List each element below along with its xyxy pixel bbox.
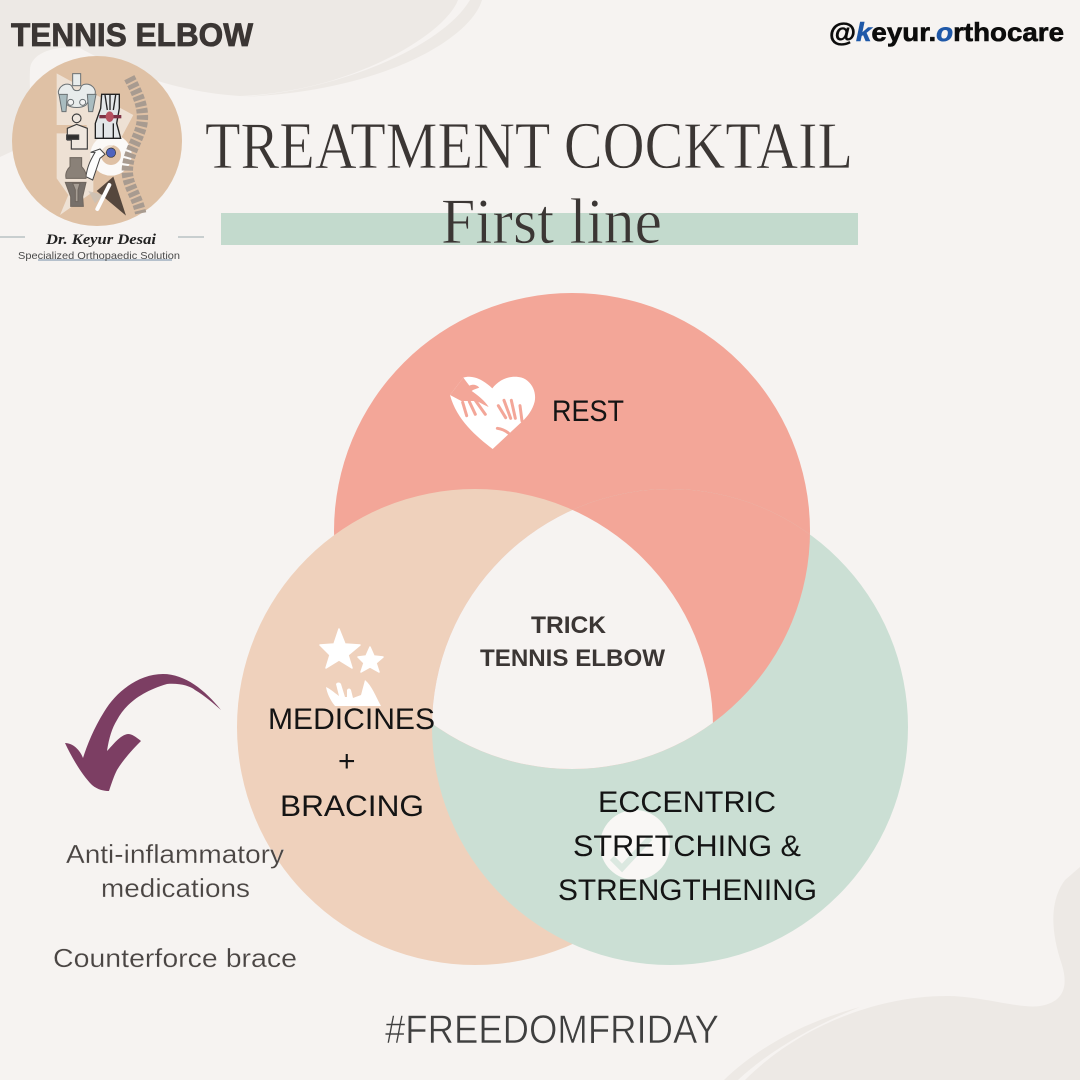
label: eccentric stretching and strengthening: STRENGTHENING bbox=[558, 874, 817, 907]
venn diagram bbox=[237, 293, 908, 965]
icon: pelvis bbox=[58, 74, 96, 112]
logo divider lines bbox=[0, 237, 204, 260]
title: TREATMENT COCKTAIL bbox=[205, 109, 853, 183]
icon: brown triangle and bone bbox=[88, 177, 126, 216]
side note: brace: Counterforce brace bbox=[53, 943, 297, 973]
background blob: bottom right bbox=[724, 867, 1080, 1080]
center label: TENNIS ELBOW bbox=[480, 645, 665, 672]
label: eccentric stretching and strengthening: ECCENTRIC bbox=[598, 786, 776, 819]
icon: spine bbox=[127, 78, 142, 213]
icon: knee replacement bbox=[65, 158, 86, 206]
label: eccentric stretching and strengthening: STRETCHING & bbox=[573, 830, 801, 863]
side note: medications bbox=[66, 839, 284, 903]
label: eccentric stretching and strengthening bbox=[558, 786, 817, 907]
label: medicines and bracing: + bbox=[338, 745, 356, 778]
label: medicines and bracing bbox=[268, 703, 435, 823]
side note: medications: Anti-inflammatory bbox=[66, 839, 284, 869]
highlight band bbox=[221, 213, 858, 245]
center label: TRICK bbox=[531, 612, 607, 639]
logo tagline: Specialized Orthopaedic Solution bbox=[18, 250, 180, 262]
label: rest: REST bbox=[552, 395, 624, 428]
icon: knee joint with red band bbox=[95, 94, 121, 138]
hashtag: #FREEDOMFRIDAY bbox=[385, 1008, 719, 1052]
background blob: top left bbox=[0, 0, 482, 157]
logo ring bbox=[96, 140, 126, 170]
logo backdrop letter shape bbox=[57, 73, 133, 215]
icon: hip implant bbox=[86, 148, 116, 180]
heading: tennis elbow: TENNIS ELBOW bbox=[11, 17, 254, 53]
icon: check circle bbox=[600, 810, 670, 880]
subtitle: First line bbox=[441, 186, 662, 258]
center label bbox=[480, 612, 665, 672]
label: medicines and bracing: MEDICINES bbox=[268, 703, 435, 736]
arrow bbox=[65, 674, 221, 791]
handle: keyur orthocare: @keyur.orthocare bbox=[829, 17, 1064, 47]
logo: orthopaedic badge bbox=[12, 56, 182, 226]
icon: heart with hands bbox=[450, 377, 535, 449]
logo signature: Dr. Keyur Desai bbox=[45, 232, 157, 248]
icon: arm sling figure bbox=[67, 114, 87, 149]
side note: medications: medications bbox=[101, 873, 250, 903]
label: medicines and bracing: BRACING bbox=[280, 790, 424, 823]
icon: stars and hand bbox=[320, 629, 383, 706]
